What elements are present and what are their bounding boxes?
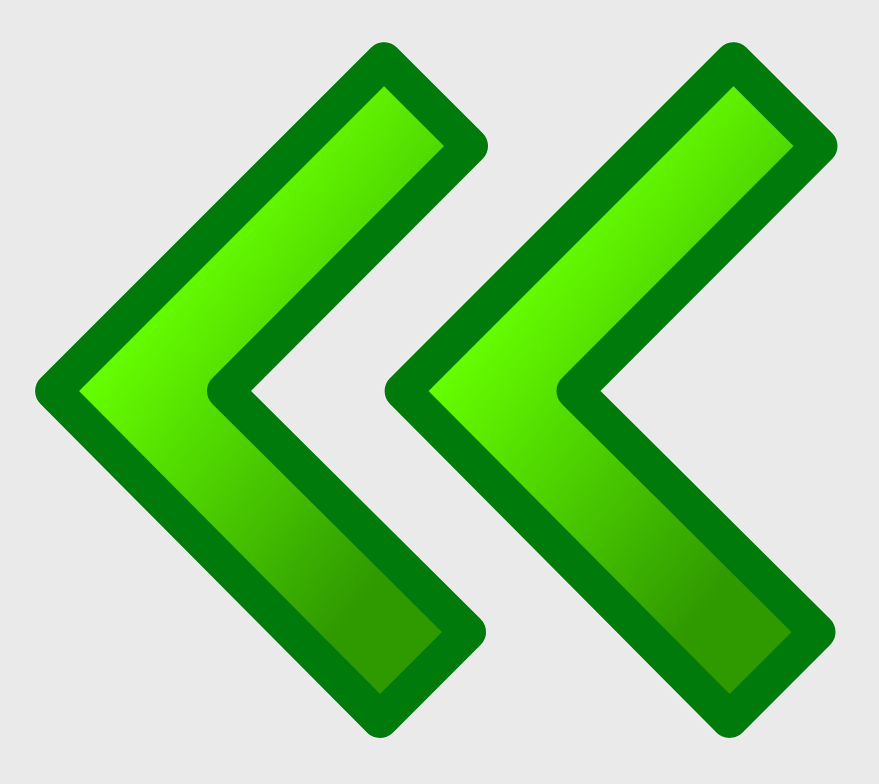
left chevron [53,60,470,720]
right chevron [403,60,819,720]
